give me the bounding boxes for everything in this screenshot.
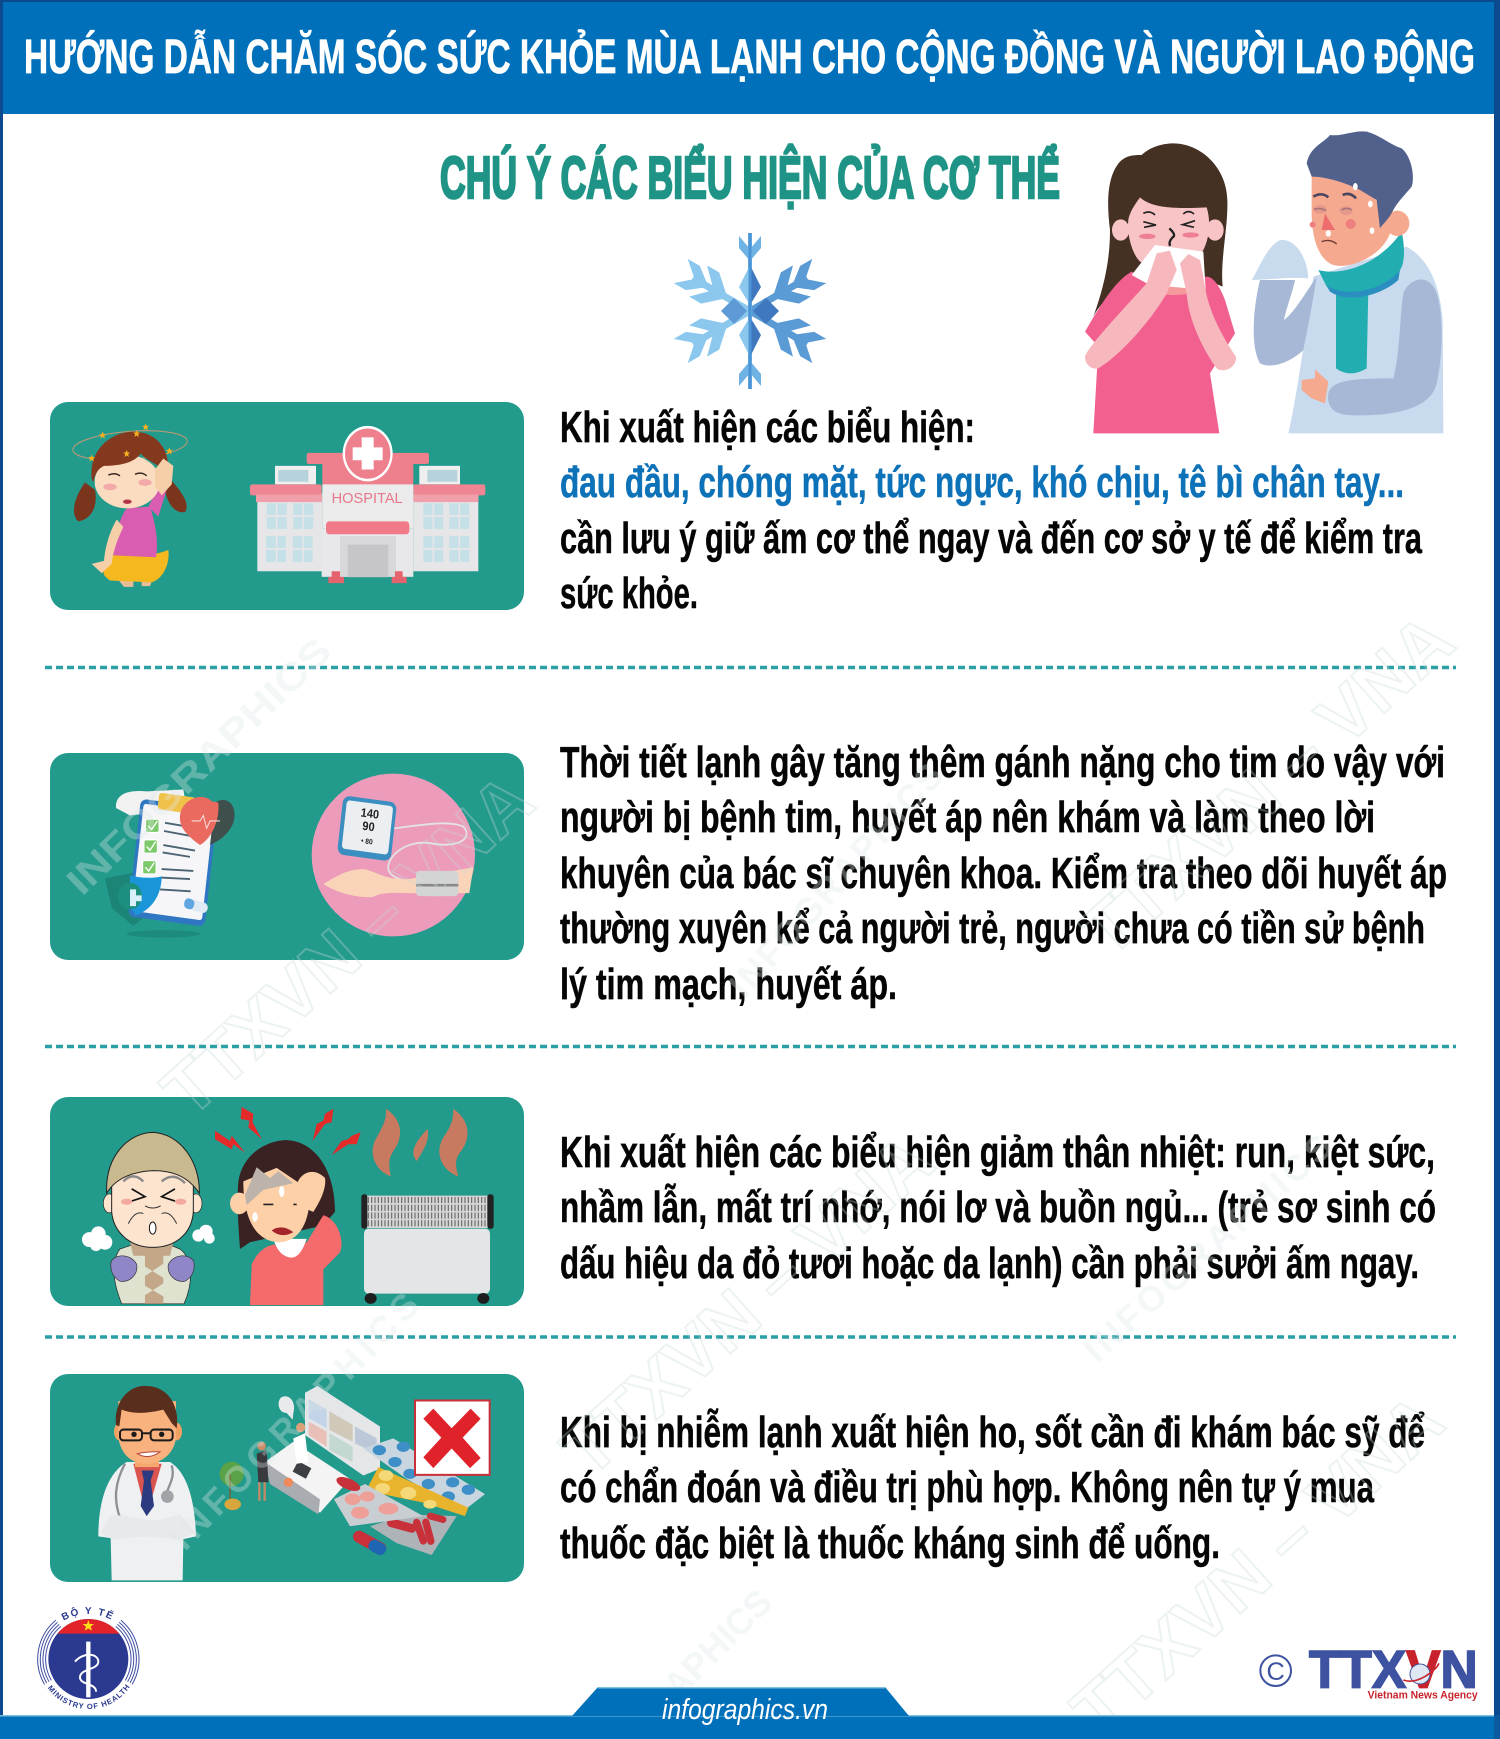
logo: TTXVN: Vietnam News Agency — [1368, 1689, 1478, 1701]
panel: health record and blood pressure — [50, 753, 524, 960]
icon: blood pressure monitor: 140 — [360, 806, 380, 822]
header banner — [0, 0, 1500, 114]
logo: Ministry of Health: BỘ Y TẾ — [61, 1607, 114, 1620]
icon: blood pressure monitor — [312, 774, 475, 936]
text block 3 — [560, 1128, 1436, 1288]
icon: pharmacy counter — [220, 1386, 380, 1514]
footer bar — [0, 1687, 1500, 1739]
watermark: TTXVN – VNA — [147, 759, 549, 1132]
icon: woman with headache — [215, 1107, 361, 1305]
watermark: INFOGRAPHICS — [720, 755, 952, 1005]
text block 1 — [560, 403, 1422, 618]
icon: blood pressure monitor: • 80 — [361, 838, 373, 847]
icon: snowflake — [672, 233, 828, 389]
icon: red cross mark — [415, 1400, 490, 1475]
watermark — [59, 599, 1469, 1739]
watermark: TTXVN – VNA — [1067, 599, 1469, 972]
watermark: INFOGRAPHICS — [59, 630, 340, 903]
man — [1252, 131, 1443, 433]
icon: shivering old man — [82, 1132, 215, 1304]
logo: TTXVN: TTXVN — [1309, 1641, 1478, 1700]
logo: TTXVN: C — [1267, 1658, 1285, 1686]
icon: checklist and heart — [105, 790, 235, 938]
panel: doctor, pharmacy and medicines — [50, 1374, 524, 1582]
logo: Ministry of Health — [37, 1607, 140, 1710]
watermark: INFOGRAPHICS — [1075, 1125, 1340, 1370]
text block 4 — [560, 1407, 1425, 1568]
illustration: sneezing girl and sick man — [1085, 131, 1443, 433]
logo: Ministry of Health: MINISTRY OF HEALTH — [48, 1684, 130, 1710]
text block 2: lý tim mạch, huyết áp. — [560, 960, 897, 1009]
icon: dizzy girl — [72, 423, 188, 587]
text block 2 — [560, 738, 1447, 1009]
section heading: CHÚ Ý CÁC BIỂU HIỆN CỦA CƠ THỂ — [440, 144, 1060, 211]
text block 1: Khi xuất hiện các biểu hiện: — [560, 403, 975, 452]
girl — [1085, 143, 1236, 433]
watermark: TTXVN – VNA — [547, 1119, 949, 1492]
icon: medicine blisters — [334, 1438, 485, 1557]
icon: doctor — [98, 1386, 196, 1580]
icon: electric heater — [361, 1109, 494, 1304]
panel: hypothermia figures and heater — [50, 1097, 524, 1306]
icon: hospital — [250, 426, 485, 583]
icon: blood pressure monitor: 90 — [362, 819, 375, 834]
footer url: infographics.vn — [662, 1694, 828, 1726]
watermark: INFOGRAPHICS — [161, 1285, 427, 1558]
icon: hospital: HOSPITAL — [332, 489, 403, 506]
panel: dizzy girl and hospital — [50, 402, 524, 610]
text block 4: thuốc đặc biệt là thuốc kháng sinh để uống. — [560, 1519, 1220, 1568]
text block 1: sức khỏe. — [560, 569, 698, 618]
